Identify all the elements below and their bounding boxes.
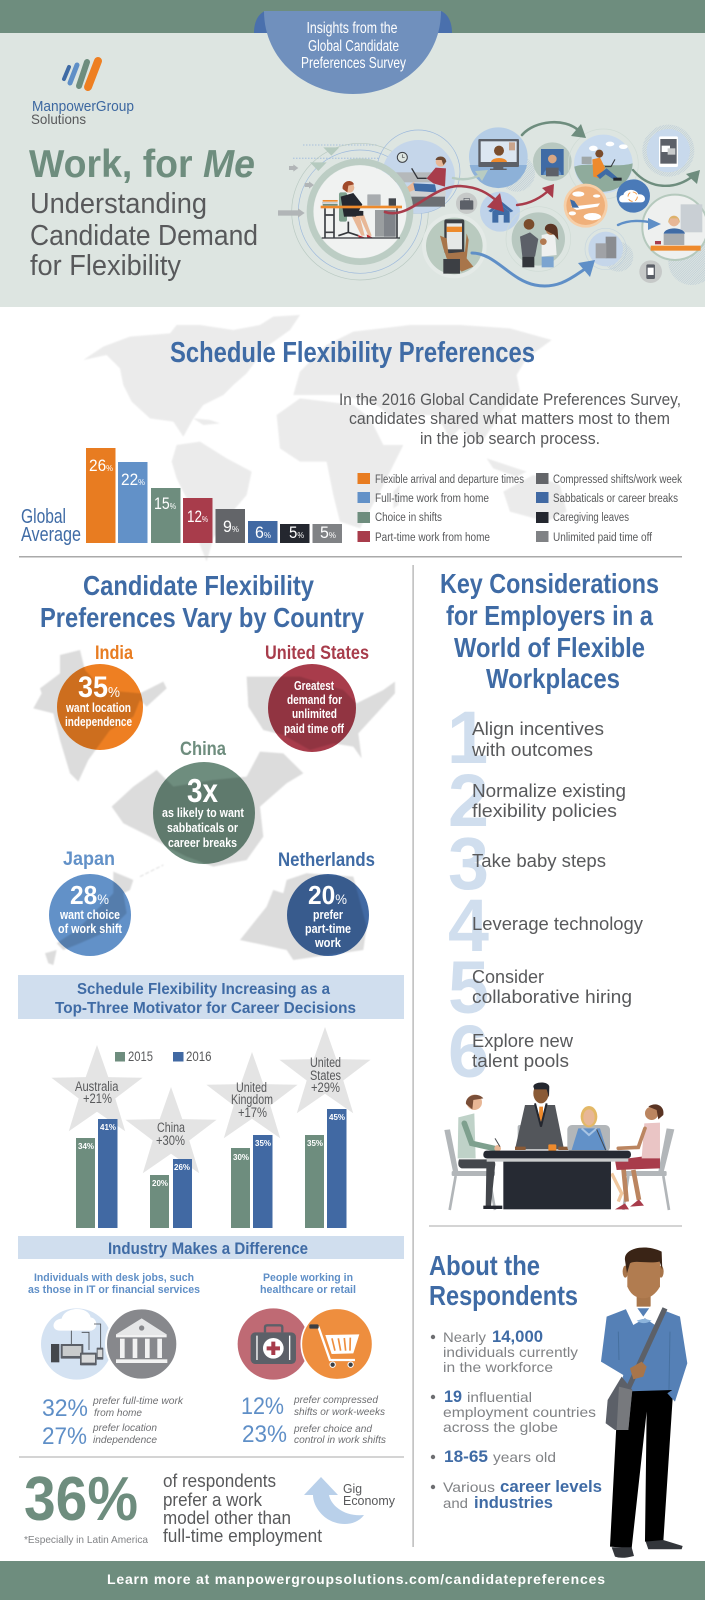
- star callouts: [51, 1027, 371, 1173]
- global average label: [21, 506, 81, 546]
- country: Netherlands: prefer: [313, 908, 343, 922]
- respondents list: 19: [444, 1387, 462, 1406]
- respondents list: individuals currently: [443, 1344, 578, 1360]
- stats: desk jobs: prefer full-time work: [92, 1395, 184, 1407]
- country: Japan: want choice: [59, 908, 120, 922]
- country: China: 3x: [187, 772, 219, 809]
- gig economy stat: prefer a work: [163, 1490, 263, 1510]
- country: Netherlands: part-time: [305, 922, 351, 936]
- stats: healthcare or retail: 23%: [242, 1421, 287, 1448]
- logo: ManpowerGroup: [32, 98, 134, 115]
- respondents list: and: [443, 1495, 468, 1511]
- survey badge: Global Candidate: [308, 38, 399, 55]
- survey badge: Insights from the: [306, 20, 398, 37]
- legend: Full-time work from home: [375, 493, 489, 505]
- global average label: Global: [21, 506, 66, 528]
- country preferences heading: Preferences Vary by Country: [40, 602, 364, 633]
- bar chart: global average: 6%: [255, 523, 271, 542]
- respondents list: employment countries: [443, 1404, 596, 1420]
- survey badge: [254, 11, 452, 94]
- about the respondents heading: [429, 1250, 578, 1311]
- key considerations heading: Workplaces: [486, 663, 620, 694]
- healthcare heading: healthcare or retail: [260, 1284, 356, 1296]
- arrow: gig economy: Economy: [343, 1493, 395, 1508]
- global average label: Average: [21, 524, 81, 546]
- gig economy stat: model other than: [163, 1508, 291, 1528]
- gig economy stat: *Especially in Latin America: [24, 1534, 148, 1546]
- country: Netherlands: 20%: [308, 880, 347, 910]
- numbered list: 2: [448, 759, 489, 842]
- icons: cloud devices and bank: [41, 1308, 177, 1380]
- legend: Flexible arrival and departure times: [375, 474, 524, 486]
- respondents list: 14,000: [492, 1327, 543, 1346]
- logo: Solutions: [31, 111, 86, 127]
- star labels: Kingdom: [231, 1092, 273, 1107]
- title: Understanding: [30, 188, 207, 220]
- bar chart: motivator by country: 35%: [255, 1138, 271, 1148]
- about the respondents heading: About the: [429, 1250, 540, 1281]
- country: India: want location: [65, 701, 131, 715]
- star labels: +30%: [156, 1133, 185, 1148]
- bar chart: global average: 12%: [187, 507, 208, 526]
- country: United States: unlimited: [292, 707, 337, 721]
- stats: desk jobs: 32%: [42, 1395, 88, 1422]
- legend: Sabbaticals or career breaks: [553, 493, 678, 505]
- survey badge: Preferences Survey: [301, 55, 406, 72]
- gig economy stat: [24, 1465, 322, 1546]
- numbered list: Take baby steps: [472, 851, 606, 871]
- banner: top-three motivator: Schedule Flexibility Increasing as a: [77, 981, 330, 998]
- healthcare heading: People working in: [263, 1272, 353, 1284]
- survey intro text: candidates shared what matters most to them: [349, 410, 670, 428]
- country: Netherlands: [278, 850, 375, 956]
- bar chart: motivator by country: [76, 1109, 346, 1228]
- respondents list: industries: [474, 1493, 553, 1512]
- country: United States: [265, 643, 369, 752]
- stats: desk jobs: 27%: [42, 1423, 87, 1450]
- illustration: flexible work scenes right: [469, 125, 705, 285]
- gig economy stat: full-time employment: [163, 1526, 322, 1546]
- country: India: independence: [65, 715, 132, 729]
- bar chart: global average: 5%: [320, 523, 336, 542]
- respondents list: Nearly: [443, 1329, 486, 1345]
- arrow: gig economy: Gig: [343, 1481, 362, 1496]
- healthcare heading: [260, 1272, 356, 1296]
- country: Japan: 28%: [70, 880, 109, 910]
- star labels: China: [157, 1120, 185, 1135]
- numbered list: 1: [447, 696, 488, 779]
- country: United States: United States: [265, 643, 369, 664]
- arrow: gig economy: [304, 1477, 395, 1524]
- bar chart: global average: 5%: [289, 523, 304, 542]
- stats: healthcare or retail: 12%: [241, 1393, 284, 1420]
- star labels: +21%: [83, 1091, 112, 1106]
- legend: Compressed shifts/work week: [553, 474, 682, 486]
- banner: top-three motivator: Top-Three Motivator for Career Decisions: [55, 1000, 356, 1017]
- header panel: [0, 0, 705, 307]
- illustration: standing man: [601, 1248, 687, 1558]
- country preferences heading: [40, 570, 364, 633]
- gig economy stat: of respondents: [163, 1471, 276, 1491]
- respondents list: Various: [443, 1479, 495, 1495]
- gig economy stat: 36%: [24, 1465, 138, 1534]
- respondents list: career levels: [500, 1477, 602, 1496]
- stats: healthcare or retail: shifts or work-weeks: [294, 1406, 386, 1418]
- respondents list: 18-65: [444, 1447, 488, 1466]
- stats: healthcare or retail: control in work shifts: [294, 1434, 387, 1446]
- bar chart: global average: [86, 448, 342, 543]
- star labels: [75, 1055, 341, 1148]
- numbered list: 4: [448, 884, 489, 967]
- banner: top-three motivator: [18, 975, 404, 1019]
- numbered list: 5: [448, 946, 489, 1029]
- bar chart: motivator by country: 26%: [174, 1162, 190, 1172]
- bar chart: motivator by country: 20%: [152, 1178, 168, 1188]
- country preferences heading: Candidate Flexibility: [83, 570, 314, 601]
- country: Japan: of work shift: [58, 922, 123, 936]
- respondents list: [431, 1327, 602, 1512]
- key considerations heading: [440, 568, 659, 694]
- stats: desk jobs: prefer location: [92, 1422, 157, 1434]
- stats: desk jobs: [42, 1395, 184, 1450]
- numbered list: Explore new: [472, 1031, 574, 1051]
- numbered list: with outcomes: [471, 740, 593, 760]
- stats: desk jobs: from home: [94, 1407, 142, 1419]
- bar chart: motivator by country: 41%: [100, 1122, 116, 1132]
- country: India: India: [95, 643, 133, 664]
- bar chart: global average: 22%: [121, 470, 145, 489]
- logo: [31, 61, 134, 127]
- numbered list: 3: [448, 822, 489, 905]
- numbered list: flexibility policies: [472, 801, 617, 821]
- country: China: sabbaticals or: [167, 821, 238, 835]
- icons: medical bag and shopping cart: [238, 1308, 373, 1380]
- country: China: as likely to want: [162, 806, 245, 820]
- respondents list: years old: [493, 1449, 556, 1465]
- country: Japan: [49, 849, 131, 956]
- stats: healthcare or retail: prefer choice and: [293, 1423, 373, 1435]
- legend: Choice in shifts: [375, 512, 442, 524]
- star labels: United: [236, 1080, 267, 1095]
- star labels: Australia: [75, 1079, 119, 1094]
- legend: Part-time work from home: [375, 532, 490, 544]
- legend: Caregiving leaves: [553, 512, 629, 524]
- title: Work, for Me: [29, 143, 255, 186]
- key considerations heading: for Employers in a: [446, 600, 653, 631]
- illustration: flexible work scenes left: [278, 130, 487, 280]
- country: Japan: Japan: [63, 849, 115, 870]
- numbered list: 6: [448, 1010, 489, 1093]
- country: Netherlands: work: [314, 936, 341, 950]
- numbered list: talent pools: [472, 1051, 569, 1071]
- country: United States: demand for: [287, 693, 342, 707]
- chart legend: 2015: [128, 1049, 153, 1064]
- world map background: [83, 315, 567, 562]
- numbered list: Consider: [472, 967, 544, 987]
- desk jobs heading: as those in IT or financial services: [28, 1284, 200, 1296]
- about the respondents heading: Respondents: [429, 1280, 578, 1311]
- stats: desk jobs: independence: [93, 1434, 157, 1446]
- banner: industry: Industry Makes a Difference: [108, 1240, 308, 1258]
- star labels: +17%: [238, 1105, 267, 1120]
- country: China: China: [180, 739, 226, 760]
- bar chart: motivator by country: 35%: [307, 1138, 323, 1148]
- bar chart: motivator by country: 45%: [329, 1112, 345, 1122]
- stats: healthcare or retail: prefer compressed: [293, 1394, 379, 1406]
- bar chart: global average: 26%: [89, 456, 113, 475]
- bar chart: global average: 15%: [154, 494, 176, 513]
- banner: industry: [18, 1236, 404, 1259]
- country: China: career breaks: [168, 836, 237, 850]
- numbered list: Leverage technology: [472, 914, 643, 934]
- illustration: connecting arrows: [385, 122, 700, 286]
- stats: healthcare or retail: [241, 1393, 387, 1448]
- country: Netherlands: Netherlands: [278, 850, 375, 871]
- numbered list: collaborative hiring: [472, 987, 632, 1007]
- key considerations heading: World of Flexible: [454, 632, 645, 663]
- star labels: +29%: [311, 1080, 340, 1095]
- chart legend: 2016: [186, 1049, 212, 1064]
- survey intro text: [339, 391, 681, 448]
- survey intro text: in the job search process.: [420, 430, 600, 448]
- legend: [358, 473, 682, 544]
- title: Candidate Demand: [30, 220, 258, 252]
- footer: Learn more at manpowergroupsolutions.com/candidatepreferences: [107, 1571, 605, 1587]
- star labels: United: [310, 1055, 341, 1070]
- star labels: States: [310, 1068, 341, 1083]
- key considerations heading: Key Considerations: [440, 568, 659, 599]
- footer: [0, 1561, 705, 1600]
- respondents list: in the workforce: [443, 1359, 553, 1375]
- bar chart: motivator by country: 34%: [78, 1141, 94, 1151]
- bar chart: global average: 9%: [223, 517, 239, 536]
- numbered list: Align incentives: [472, 719, 604, 739]
- desk jobs heading: Individuals with desk jobs, such: [34, 1272, 194, 1284]
- bar chart: motivator by country: 30%: [233, 1152, 249, 1162]
- respondents list: across the globe: [443, 1419, 558, 1435]
- illustration: meeting: [444, 1083, 674, 1210]
- schedule flexibility heading: Schedule Flexibility Preferences: [170, 337, 535, 369]
- title: for Flexibility: [30, 250, 181, 282]
- legend: Unlimited paid time off: [553, 532, 653, 544]
- country: United States: paid time off: [284, 722, 345, 736]
- respondents list: influential: [467, 1389, 532, 1405]
- country: India: 35%: [78, 671, 120, 704]
- numbered list: Normalize existing: [472, 781, 626, 801]
- chart legend: [115, 1049, 212, 1064]
- survey intro text: In the 2016 Global Candidate Preferences Survey,: [339, 391, 681, 409]
- country maps: [33, 650, 395, 965]
- country: India: [57, 643, 143, 750]
- desk jobs heading: [28, 1272, 200, 1296]
- country: United States: Greatest: [294, 679, 335, 693]
- numbered list: [447, 696, 643, 1093]
- title: [29, 143, 258, 282]
- country: China: [153, 739, 255, 864]
